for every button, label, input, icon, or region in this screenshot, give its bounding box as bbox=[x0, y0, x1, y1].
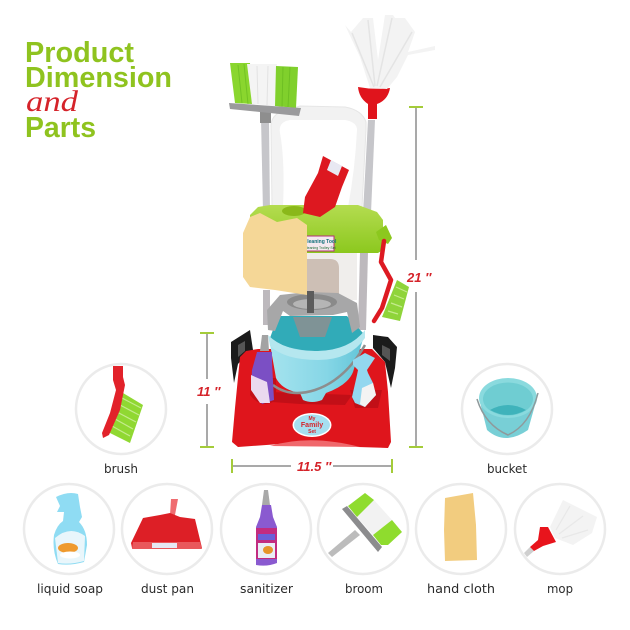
liquid soap bottle on base bbox=[352, 353, 376, 407]
main product: cleaning trolley toy bbox=[229, 15, 435, 448]
mop on trolley bbox=[345, 15, 435, 213]
title: Product bbox=[25, 37, 134, 69]
part: broom bbox=[318, 484, 408, 596]
part: sanitizer bbox=[221, 484, 311, 596]
label: hand cloth: hand cloth bbox=[427, 582, 495, 596]
tray label bbox=[304, 236, 337, 251]
family set sticker: Set bbox=[308, 429, 316, 435]
mop wringer bbox=[267, 291, 360, 337]
broom on trolley bbox=[229, 63, 301, 212]
part: bucket bbox=[462, 364, 552, 476]
trolley handle bbox=[271, 106, 366, 207]
sanitizer bottle on base bbox=[251, 335, 274, 404]
wheels bbox=[231, 330, 397, 388]
inner cabinet bbox=[263, 250, 368, 330]
dust pan in tray bbox=[303, 156, 349, 217]
title: Dimension bbox=[25, 62, 172, 94]
part: dust pan bbox=[122, 484, 212, 596]
tray label: Cleaning Trolley Set bbox=[304, 246, 336, 250]
dimension: height 11 inches bbox=[197, 333, 221, 447]
green tray bbox=[250, 205, 383, 253]
part: brush bbox=[76, 364, 166, 476]
family set sticker bbox=[292, 413, 332, 437]
label: dust pan: dust pan bbox=[141, 582, 194, 596]
label: sanitizer: sanitizer bbox=[240, 582, 293, 596]
family set sticker: Family bbox=[301, 422, 323, 429]
tray label: Cleaning Tool bbox=[304, 239, 337, 245]
part: mop bbox=[515, 484, 605, 596]
dimension: width 11.5 inches: 11.5 ″ bbox=[297, 459, 332, 474]
red base bbox=[232, 349, 391, 448]
title: and bbox=[26, 85, 79, 118]
hanging brush bbox=[374, 225, 409, 321]
dimension: height 21 inches bbox=[406, 107, 432, 447]
label: broom: broom bbox=[345, 582, 383, 596]
title: Parts bbox=[25, 112, 96, 144]
dimension: height 21 inches: 21 ″ bbox=[406, 270, 432, 285]
dimension: height 11 inches: 11 ″ bbox=[197, 384, 221, 399]
dimension: width 11.5 inches bbox=[232, 459, 392, 474]
label: mop: mop bbox=[547, 582, 573, 596]
part: hand cloth bbox=[416, 484, 506, 596]
part: liquid soap bbox=[24, 484, 114, 596]
label: liquid soap: liquid soap bbox=[37, 582, 103, 596]
family set sticker: My bbox=[309, 416, 316, 422]
yellow cloth bbox=[243, 213, 307, 295]
label: brush: brush bbox=[104, 462, 138, 476]
title bbox=[25, 37, 172, 144]
bucket bbox=[268, 316, 365, 402]
label: bucket: bucket bbox=[487, 462, 527, 476]
